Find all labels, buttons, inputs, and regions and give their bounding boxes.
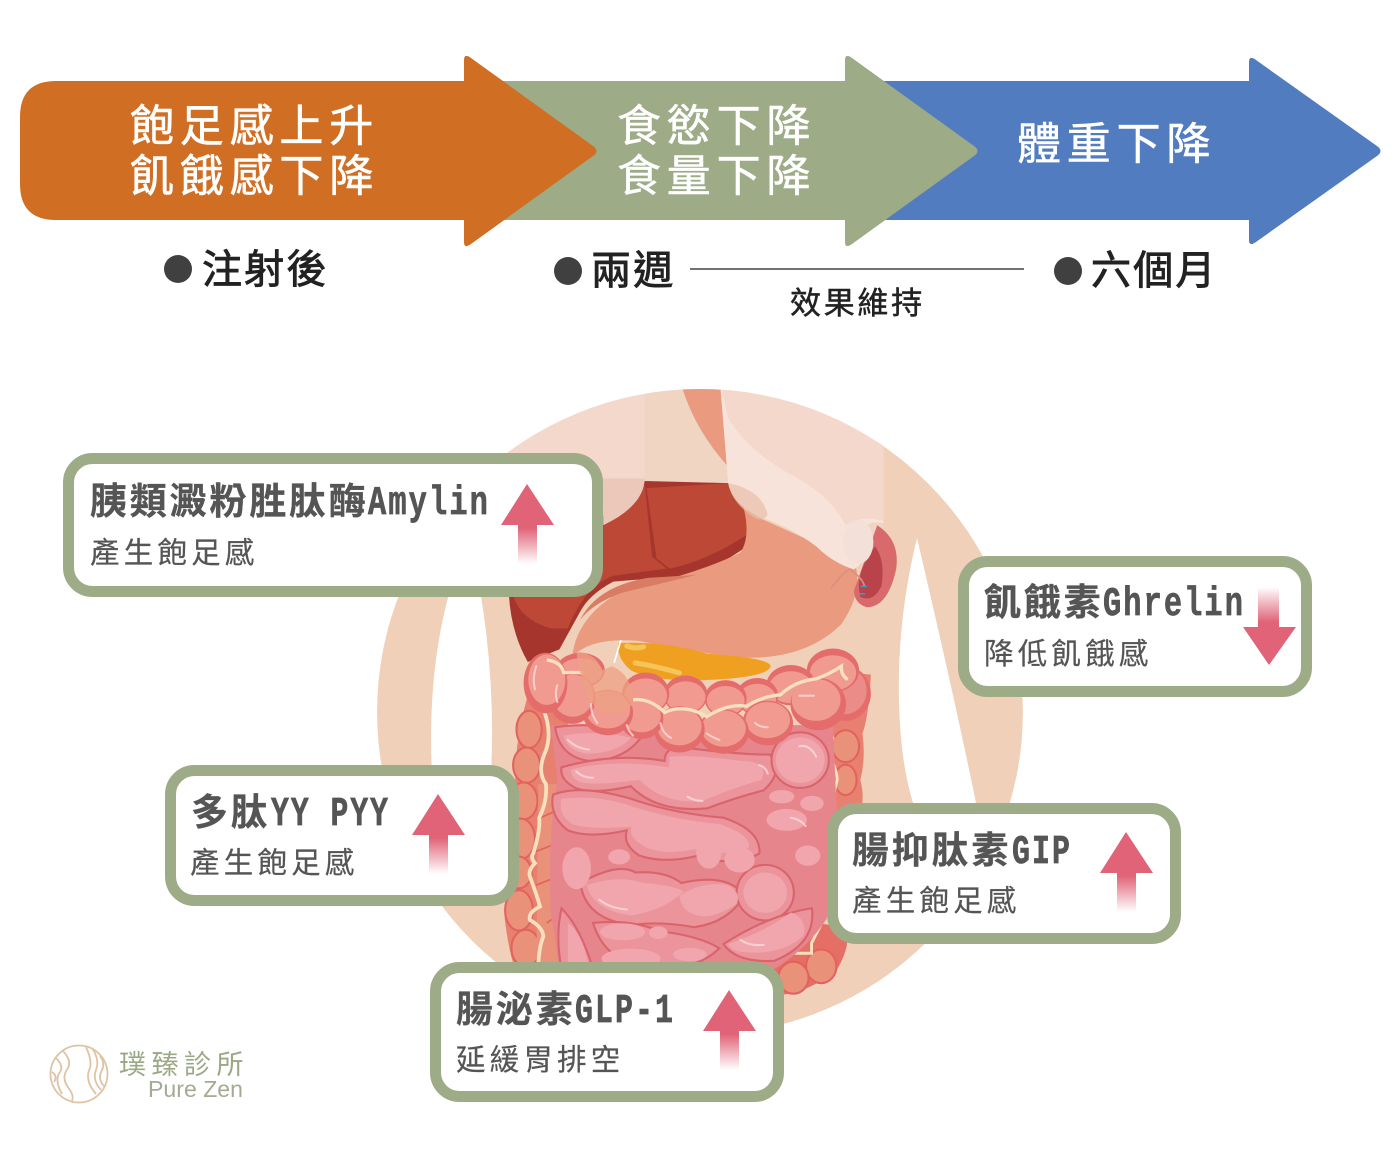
heading: GLP-1 bbox=[575, 989, 675, 1035]
text: satiety up, hunger down: 飢餓感下降 bbox=[130, 152, 379, 201]
stomach bbox=[572, 380, 857, 658]
heading: 腸抑肽素 bbox=[852, 830, 1011, 871]
torso background bbox=[377, 389, 1023, 1035]
arrow: orange satiety stage bbox=[20, 56, 596, 246]
text: satiety up, hunger down: 飽足感上升 bbox=[130, 102, 379, 151]
timeline label: after injection: 注射後 bbox=[202, 248, 329, 292]
illustration: torso with digestive organs bbox=[377, 380, 1023, 1035]
callout: GLP-1 bbox=[436, 968, 778, 1096]
ascending colon band bbox=[529, 713, 549, 969]
arrow: green appetite stage bbox=[490, 56, 978, 246]
translucent pylorus overlay bbox=[576, 651, 633, 714]
heading: Amylin bbox=[368, 481, 490, 527]
callout: GIP bbox=[832, 808, 1176, 938]
description: 產生飽足感 bbox=[190, 847, 359, 880]
spleen bbox=[831, 525, 897, 607]
colon back row bbox=[556, 649, 871, 721]
highlights on colon bbox=[534, 666, 816, 945]
description: 產生飽足感 bbox=[90, 537, 259, 570]
logo name Chinese: 璞臻診所 bbox=[119, 1050, 249, 1080]
heading: 飢餓素 bbox=[984, 582, 1103, 623]
small intestine bbox=[550, 725, 837, 969]
callout: PYY bbox=[170, 770, 514, 900]
arrow up bbox=[703, 990, 756, 1070]
logo name English: Pure Zen bbox=[148, 1076, 243, 1102]
text: appetite and intake down: 食慾下降 bbox=[617, 102, 816, 151]
heading: GIP bbox=[1012, 830, 1072, 876]
heading: 腸泌素 bbox=[456, 989, 575, 1030]
timeline label: two weeks: 兩週 bbox=[591, 249, 675, 293]
translucent lung overlay bbox=[720, 380, 883, 569]
transverse colon bbox=[524, 649, 871, 754]
lungs translucent bbox=[507, 394, 645, 478]
spine band bbox=[645, 389, 884, 536]
timeline label: two weeks bbox=[554, 249, 675, 293]
arrow up bbox=[501, 484, 554, 564]
text: effect maintained: 效果維持 bbox=[790, 286, 925, 321]
text: appetite and intake down: 食量下降 bbox=[617, 152, 816, 201]
heading: 多肽 bbox=[191, 792, 271, 833]
description: 延緩胃排空 bbox=[456, 1044, 625, 1077]
heading: YY PYY bbox=[271, 792, 390, 838]
callout: ghrelin bbox=[964, 562, 1306, 692]
description: 產生飽足感 bbox=[852, 885, 1021, 918]
heading: Ghrelin bbox=[1103, 582, 1245, 628]
callout: amylin bbox=[68, 458, 598, 592]
heading: 胰類澱粉胜肽酶 bbox=[90, 481, 369, 522]
arrow down bbox=[1243, 587, 1296, 665]
arrow up bbox=[1100, 832, 1153, 912]
pancreas bbox=[614, 640, 771, 680]
logo: clinic mark and name bbox=[50, 1046, 249, 1102]
logo mark bbox=[50, 1046, 108, 1102]
arrow up bbox=[412, 794, 465, 874]
liver bbox=[509, 478, 756, 662]
descending colon bbox=[770, 670, 871, 995]
description: 降低飢餓感 bbox=[984, 638, 1153, 671]
ascending colon bbox=[505, 696, 568, 969]
text: weight down: 體重下降 bbox=[1017, 120, 1216, 169]
timeline label: six months: 六個月 bbox=[1091, 249, 1218, 293]
arrow: blue weight stage bbox=[870, 58, 1380, 244]
colon front row bbox=[524, 653, 846, 754]
transverse colon band bbox=[547, 660, 848, 717]
